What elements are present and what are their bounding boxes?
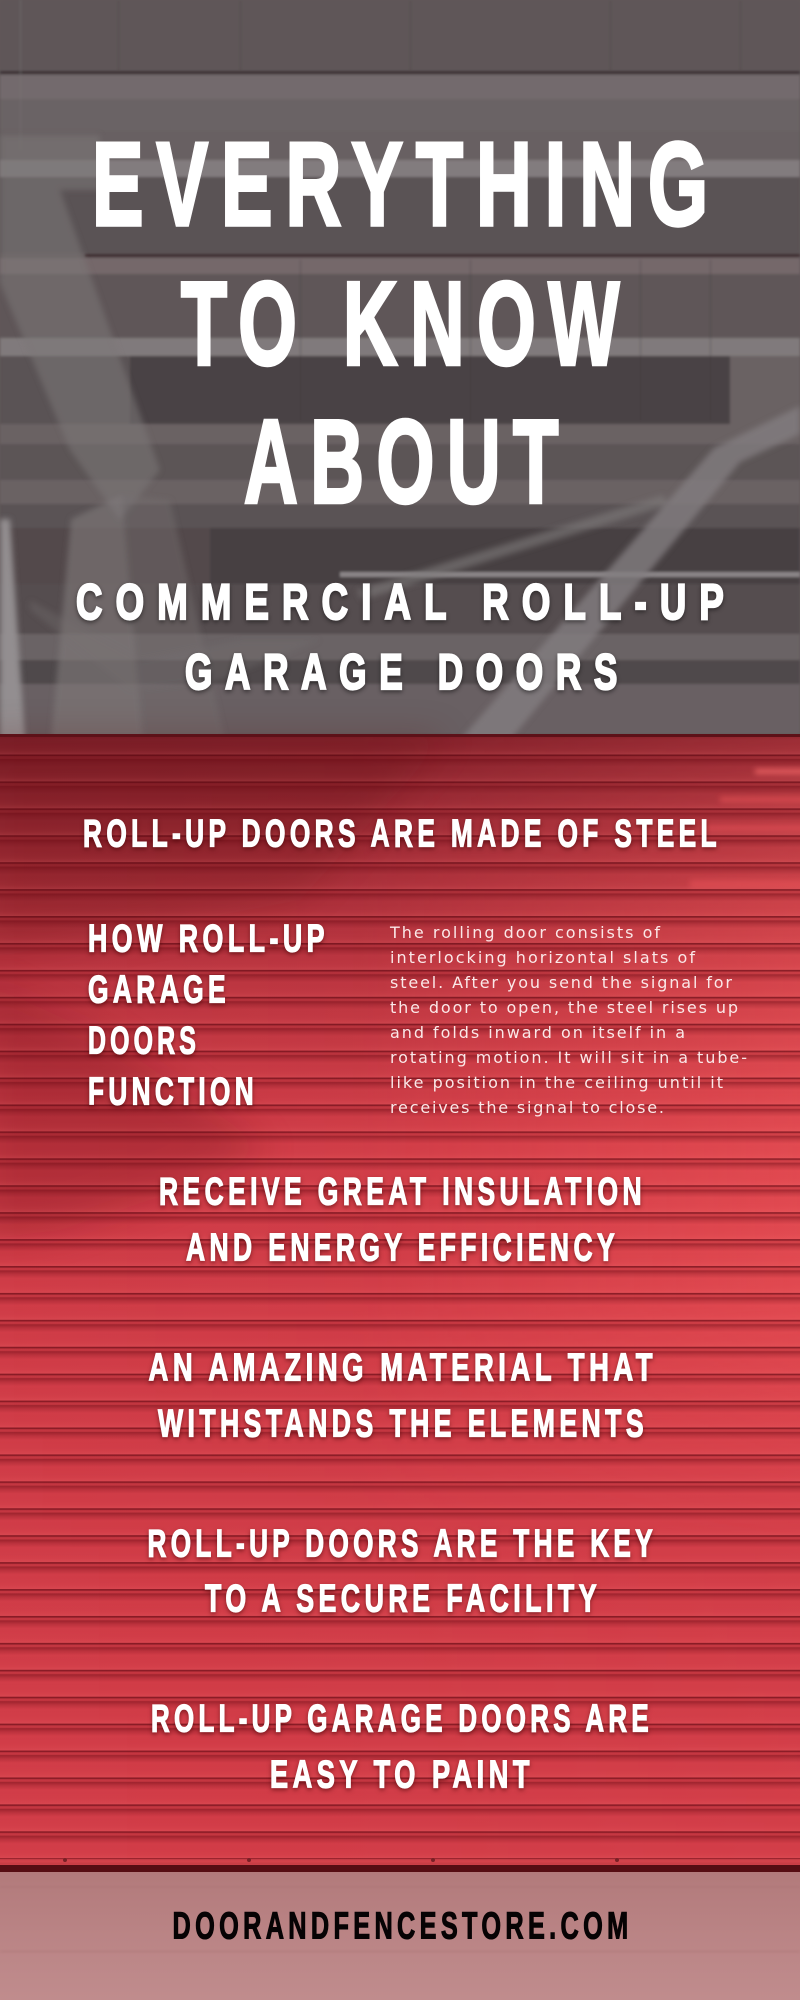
text block: rolling door explanation: like position in the ceiling until it xyxy=(390,1073,723,1092)
heading: withstands the elements xyxy=(148,1346,657,1446)
title xyxy=(92,118,721,528)
panel: red roll-up door background xyxy=(0,734,800,1872)
text block: rolling door explanation: receives the signal to close. xyxy=(390,1098,664,1117)
heading: key to a secure facility xyxy=(148,1522,657,1620)
heading: how roll-up garage doors function: HOW ROLL-UP xyxy=(88,918,329,960)
icon: diagonal steel beams xyxy=(0,135,800,740)
heading: easy to paint: EASY TO PAINT xyxy=(270,1754,534,1796)
heading: how roll-up garage doors function: DOORS xyxy=(88,1020,200,1062)
heading: how roll-up garage doors function: GARAGE xyxy=(88,968,230,1012)
icon: door bottom rivets xyxy=(63,1858,619,1862)
text block: rolling door explanation: steel. After you send the signal for xyxy=(390,973,732,992)
text block: rolling door explanation xyxy=(389,923,747,1117)
text block: rolling door explanation: the door to open, the steel rises up xyxy=(390,998,738,1017)
text block: rolling door explanation: The rolling door consists of xyxy=(389,923,660,942)
panel: footer band xyxy=(0,1872,800,2000)
heading: easy to paint xyxy=(151,1698,653,1796)
text block: rolling door explanation: and folds inward on itself in a xyxy=(390,1023,685,1042)
title: ABOUT xyxy=(244,396,571,528)
subtitle: GARAGE DOORS xyxy=(185,644,630,700)
subtitle xyxy=(76,574,737,700)
heading: how roll-up garage doors function: FUNCTION xyxy=(88,1070,258,1114)
heading: how roll-up garage doors function xyxy=(88,918,329,1114)
text block: rolling door explanation: interlocking horizontal slats of xyxy=(390,948,695,967)
panel: warehouse ceiling photo background xyxy=(0,0,800,740)
heading: insulation and energy efficiency xyxy=(159,1170,646,1270)
text block: rolling door explanation: rotating motion. It will sit in a tube- xyxy=(390,1048,747,1067)
heading: key to a secure facility: TO A SECURE FACILITY xyxy=(205,1578,601,1620)
